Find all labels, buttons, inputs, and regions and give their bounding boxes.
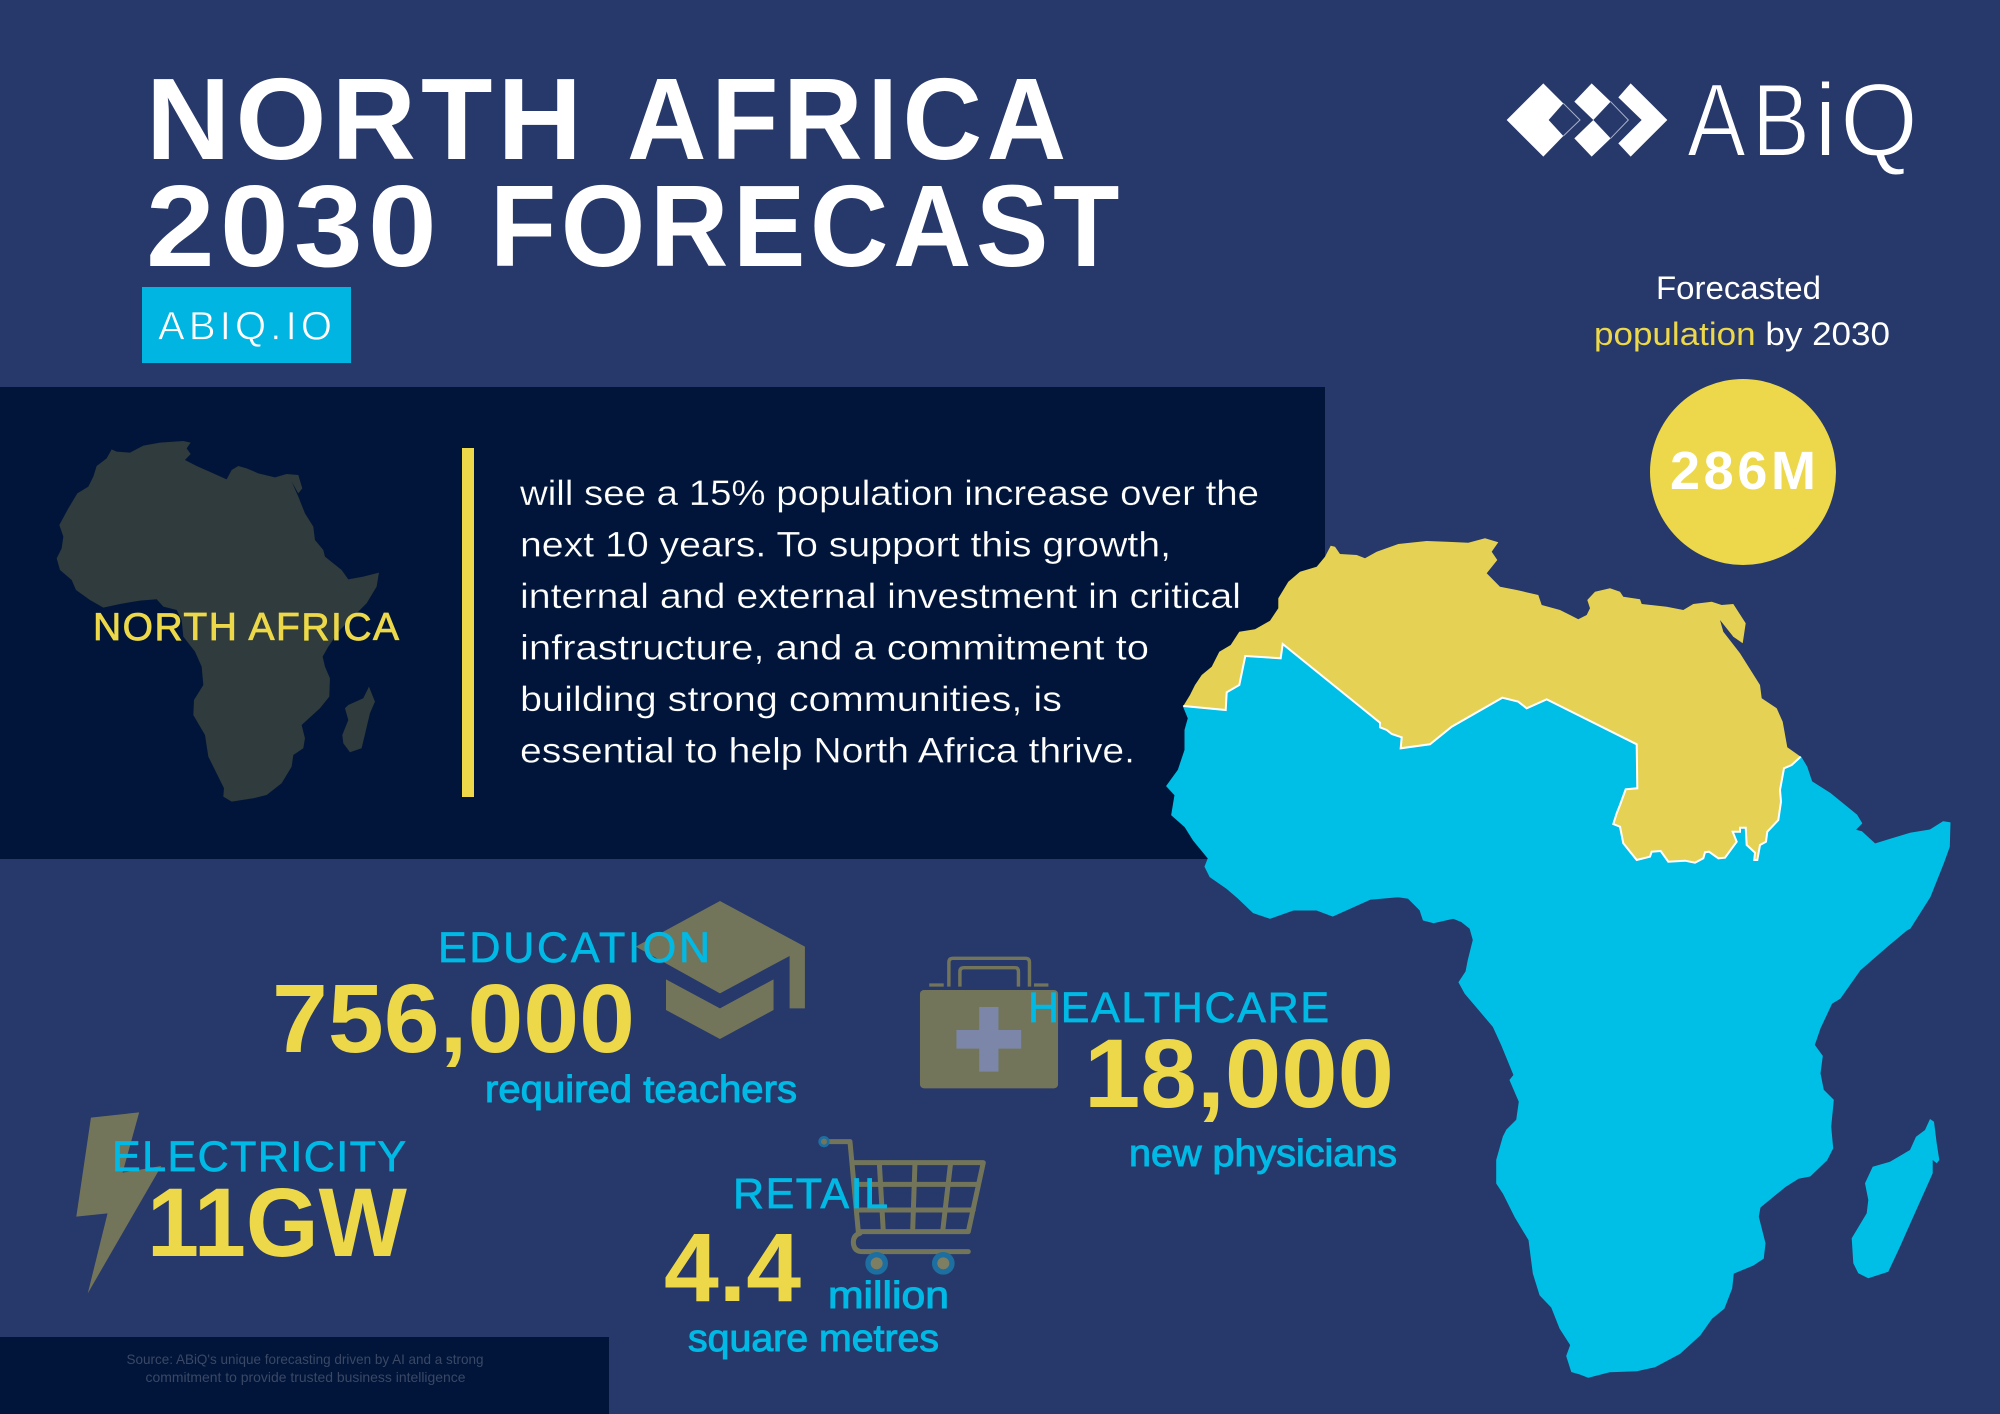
logo wordmark: B: [1752, 63, 1810, 179]
stat: electricity: 11GW: [147, 1168, 407, 1277]
population label: population by 2030: [1594, 316, 1890, 352]
panel: source note: [0, 1337, 609, 1414]
population callout: [1594, 270, 1890, 565]
title: AFRICA: [627, 54, 1071, 184]
stat: healthcare: new physicians: [1129, 1133, 1397, 1175]
mini map of Africa: [57, 441, 379, 802]
icon: logo diamonds: [1507, 83, 1667, 157]
website badge: ABIQ.IO: [158, 304, 332, 348]
stat: electricity: [76, 1112, 407, 1293]
population circle: [1650, 379, 1836, 565]
logo: ABiQ: [1507, 63, 1918, 179]
icon: first aid kit: [920, 958, 1058, 1088]
map region: Madagascar: [1852, 1119, 1939, 1278]
stat: retail: million: [828, 1275, 949, 1317]
panel: source note: commitment to provide trusted business intelligence: [146, 1369, 466, 1385]
intro paragraph: [519, 474, 1259, 770]
panel: source note: Source: ABiQ's unique forecasting driven by AI and a strong: [126, 1351, 484, 1367]
stat: electricity: ELECTRICITY: [112, 1133, 406, 1181]
stat: education: 756,000: [272, 964, 635, 1073]
stat: healthcare: 18,000: [1084, 1019, 1394, 1128]
title: NORTH: [146, 54, 587, 184]
stat: retail: RETAIL: [733, 1170, 888, 1218]
panel: intro: [0, 387, 1325, 859]
population label: [1594, 270, 1890, 352]
logo wordmark: A: [1687, 63, 1747, 179]
stat: retail: [664, 1137, 983, 1360]
logo wordmark: [1687, 63, 1918, 179]
map: Africa with North Africa highlighted: [1167, 538, 1950, 1377]
stat: healthcare: HEALTHCARE: [1028, 984, 1329, 1032]
accent bar: [462, 448, 474, 797]
logo wordmark: Q: [1840, 63, 1918, 179]
stat: education: required teachers: [485, 1069, 797, 1111]
icon: lightning bolt: [76, 1112, 161, 1293]
stat: retail: square metres: [688, 1318, 939, 1360]
logo wordmark: i: [1814, 63, 1837, 179]
title: FORECAST: [490, 161, 1124, 291]
stat: education: [272, 901, 805, 1111]
stat: healthcare: [920, 958, 1397, 1175]
intro paragraph: building strong communities, is: [520, 680, 1062, 719]
mini map label: NORTH AFRICA: [93, 606, 399, 649]
map region border: [1183, 644, 1801, 863]
intro paragraph: will see a 15% population increase over the: [519, 474, 1259, 513]
icon: graduation cap: [636, 901, 805, 1039]
icon: shopping cart: [820, 1137, 983, 1272]
website badge: [142, 287, 351, 363]
title: [146, 54, 1124, 291]
intro paragraph: infrastructure, and a commitment to: [520, 628, 1149, 668]
title: 2030: [146, 161, 442, 291]
map region: North Africa: [1183, 538, 1801, 863]
population label: Forecasted: [1656, 270, 1821, 306]
population circle: 286M: [1670, 441, 1816, 501]
intro paragraph: internal and external investment in critical: [520, 577, 1241, 616]
stat: retail: 4.4: [664, 1213, 801, 1322]
intro paragraph: essential to help North Africa thrive.: [520, 732, 1135, 770]
intro paragraph: next 10 years. To support this growth,: [520, 526, 1171, 564]
map region: sub-Saharan Africa: [1167, 644, 1950, 1377]
stat: education: EDUCATION: [438, 924, 710, 972]
